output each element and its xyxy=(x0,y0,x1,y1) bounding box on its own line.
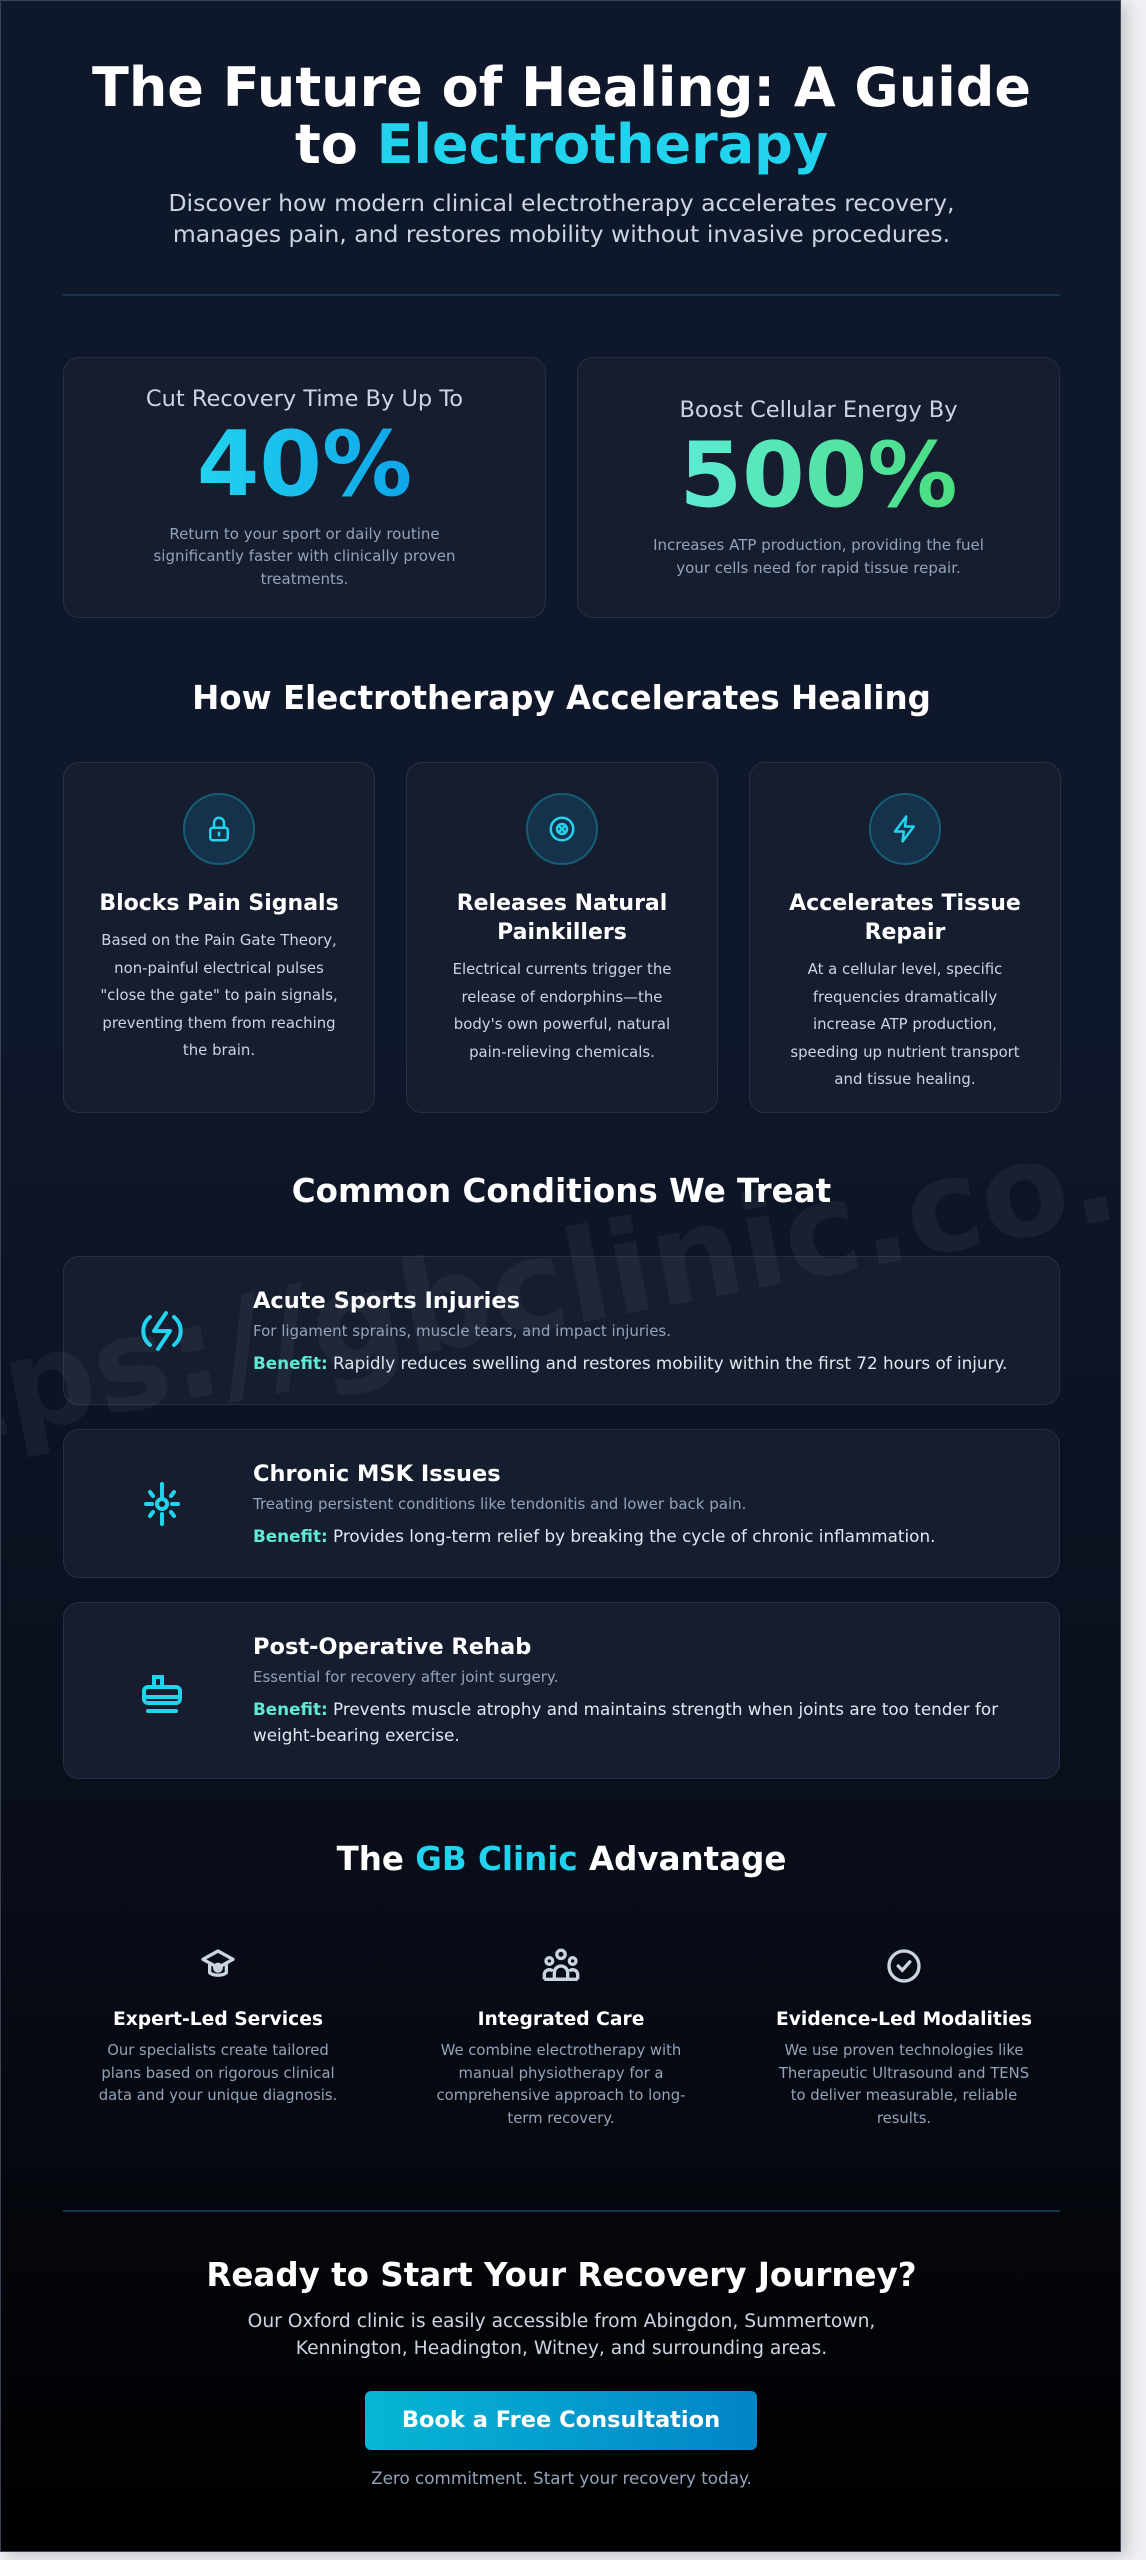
card: blocks pain xyxy=(63,762,375,1113)
heading: how it works: How Electrotherapy Accelerates Healing xyxy=(192,679,931,717)
heading: advantage: The GB Clinic Advantage xyxy=(337,1840,786,1878)
icon: bolt xyxy=(869,793,941,865)
title xyxy=(92,56,1031,176)
advantage: expert xyxy=(99,1949,337,2104)
card: blocks pain: Based on the Pain Gate Theory, non-painful electrical pulses "close the gate" to pain signals, preventing them from reaching the brain. xyxy=(100,931,338,1059)
stat card: recovery time: 40% xyxy=(197,412,412,517)
advantage: expert: Expert-Led Services xyxy=(113,2009,323,2030)
stat card: cellular energy: 500% xyxy=(679,423,958,528)
title: to Electrotherapy xyxy=(295,113,828,176)
stat card: cellular energy xyxy=(577,357,1060,618)
icon: grad cap xyxy=(201,1949,235,1977)
stat card: recovery time: Cut Recovery Time By Up To xyxy=(146,386,463,412)
condition: chronic MSK: Treating persistent conditions like tendonitis and lower back pain. xyxy=(253,1495,746,1513)
CTA button: Book a Free Consultation xyxy=(402,2407,720,2433)
condition: post-op: Post-Operative Rehab xyxy=(253,1634,531,1660)
subtitle: manages pain, and restores mobility without invasive procedures. xyxy=(173,220,950,248)
card: painkillers xyxy=(406,762,718,1113)
advantage: integrated: Integrated Care xyxy=(478,2009,644,2030)
condition: sports injuries: Acute Sports Injuries xyxy=(253,1288,520,1314)
stat card: cellular energy: Boost Cellular Energy By xyxy=(679,397,958,423)
condition: chronic MSK: Chronic MSK Issues xyxy=(253,1461,501,1487)
CTA text: Kennington, Headington, Witney, and surrounding areas. xyxy=(296,2338,827,2359)
icon: lock xyxy=(183,793,255,865)
icon: smile badge xyxy=(526,793,598,865)
advantage: integrated: We combine electrotherapy with manual physiotherapy for a comprehensive approach to long-term recovery. xyxy=(437,2042,685,2126)
condition: sports injuries: Benefit: Rapidly reduces swelling and restores mobility within the first 72 hours of injury. xyxy=(253,1353,1007,1373)
subtitle: Discover how modern clinical electrotherapy accelerates recovery, xyxy=(168,189,955,217)
condition: chronic MSK xyxy=(63,1429,1060,1578)
icon: check circle xyxy=(887,1949,921,1983)
stat card: recovery time: Return to your sport or daily routine significantly faster with clinically proven treatments. xyxy=(153,525,456,588)
advantage: integrated xyxy=(437,1948,685,2126)
condition: post-op: Benefit: Prevents muscle atrophy and maintains strength when joints are too tender for weight-bearing exercise. xyxy=(253,1699,998,1745)
icon: people xyxy=(542,1948,580,1981)
card: blocks pain: Blocks Pain Signals xyxy=(99,891,339,916)
CTA heading: Ready to Start Your Recovery Journey? xyxy=(206,2256,917,2294)
condition: sports injuries xyxy=(63,1256,1060,1405)
advantage: evidence: We use proven technologies like Therapeutic Ultrasound and TENS to deliver measurable, reliable results. xyxy=(779,2042,1029,2126)
CTA text: Our Oxford clinic is easily accessible from Abingdon, Summertown, xyxy=(248,2311,875,2332)
advantage: evidence: Evidence-Led Modalities xyxy=(776,2009,1032,2030)
title: The Future of Healing: A Guide xyxy=(92,56,1031,119)
icon: bolt arrows xyxy=(141,1310,183,1352)
subtitle xyxy=(168,189,955,248)
heading: conditions: Common Conditions We Treat xyxy=(292,1172,831,1210)
condition: post-op xyxy=(63,1602,1060,1779)
condition: sports injuries: For ligament sprains, muscle tears, and impact injuries. xyxy=(253,1322,671,1340)
icon: radiating point xyxy=(144,1482,180,1526)
card: tissue repair: Accelerates Tissue Repair xyxy=(789,891,1021,945)
condition: post-op: Essential for recovery after joint surgery. xyxy=(253,1668,558,1686)
card: tissue repair xyxy=(749,762,1061,1113)
stat card: cellular energy: Increases ATP production, providing the fuel your cells need for rapid tissue repair. xyxy=(653,536,984,576)
stat card: recovery time xyxy=(63,357,546,618)
advantage: expert: Our specialists create tailored plans based on rigorous clinical data and your unique diagnosis. xyxy=(99,2042,337,2104)
card: painkillers: Releases Natural Painkillers xyxy=(457,891,667,945)
card: painkillers: Electrical currents trigger the release of endorphins—the body's own powerful, natural pain-relieving chemicals. xyxy=(453,960,671,1061)
icon: bed xyxy=(142,1675,182,1713)
CTA text xyxy=(248,2311,875,2359)
advantage: evidence xyxy=(776,1949,1032,2126)
condition: chronic MSK: Benefit: Provides long-term relief by breaking the cycle of chronic inflammation. xyxy=(253,1526,935,1546)
CTA button xyxy=(365,2391,757,2450)
footnote: Zero commitment. Start your recovery today. xyxy=(371,2468,752,2488)
card: tissue repair: At a cellular level, specific frequencies dramatically increase ATP production, speeding up nutrient transport and tissue healing. xyxy=(790,960,1020,1088)
